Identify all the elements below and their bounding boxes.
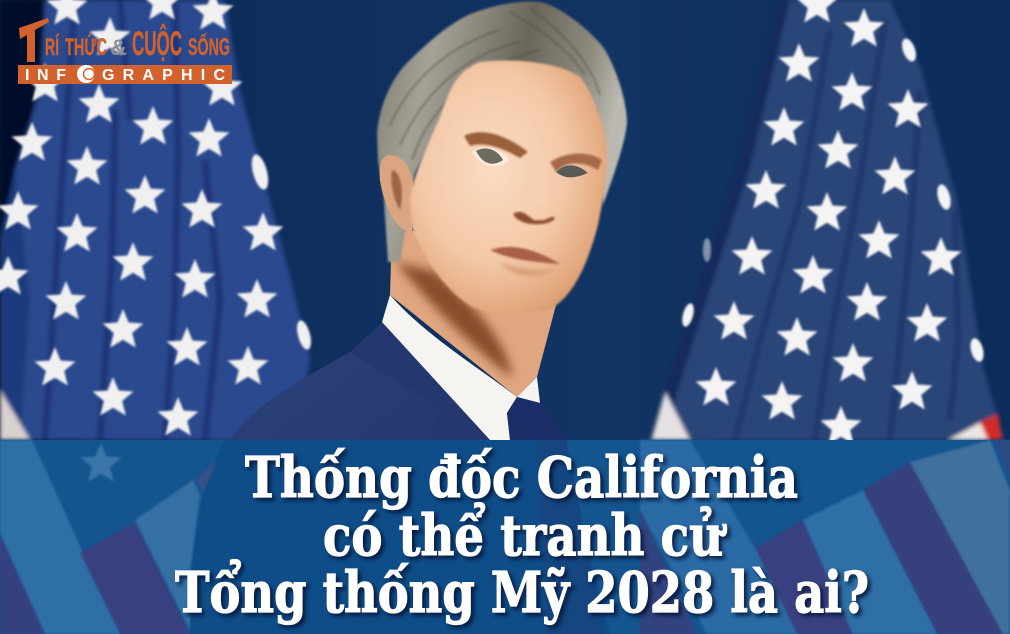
right flag stars <box>680 0 986 444</box>
bottom title band <box>0 440 1010 634</box>
logo wordmark: THỨC <box>65 33 107 61</box>
hair <box>377 2 627 262</box>
neck shadow <box>396 262 512 378</box>
left American flag <box>0 0 314 440</box>
logo wordmark: CUỘC <box>132 24 182 63</box>
face <box>410 61 607 314</box>
suit lapel <box>350 322 490 440</box>
band overlay: tie <box>535 440 605 634</box>
necktie <box>507 397 567 440</box>
logo wordmark: SỐNG <box>188 33 230 61</box>
neck <box>390 225 556 397</box>
facial features <box>464 132 602 276</box>
icon: logo T mark <box>19 18 49 62</box>
infographic strip <box>18 65 232 84</box>
logo wordmark: RÍ <box>45 33 60 61</box>
band stripes <box>0 440 1010 634</box>
title <box>175 445 869 626</box>
ear <box>380 155 414 232</box>
infographic strip: INF <box>25 67 66 84</box>
title: có thể tranh cử <box>323 502 727 569</box>
ear shadow <box>391 170 402 210</box>
title: Tổng thống Mỹ 2028 là ai? <box>175 559 869 626</box>
right American flag <box>650 0 1002 444</box>
infographic strip: GRAPHIC <box>102 67 225 84</box>
shirt collar <box>382 295 540 440</box>
hair strands <box>390 8 600 160</box>
portrait of the governor <box>190 2 627 634</box>
band overlay: suit silhouette <box>190 440 610 634</box>
logo wordmark: & <box>110 35 127 60</box>
logo <box>18 18 232 84</box>
left flag stars <box>0 0 314 436</box>
title: Thống đốc California <box>245 445 798 511</box>
logo wordmark <box>45 24 230 63</box>
suit jacket <box>190 322 610 634</box>
